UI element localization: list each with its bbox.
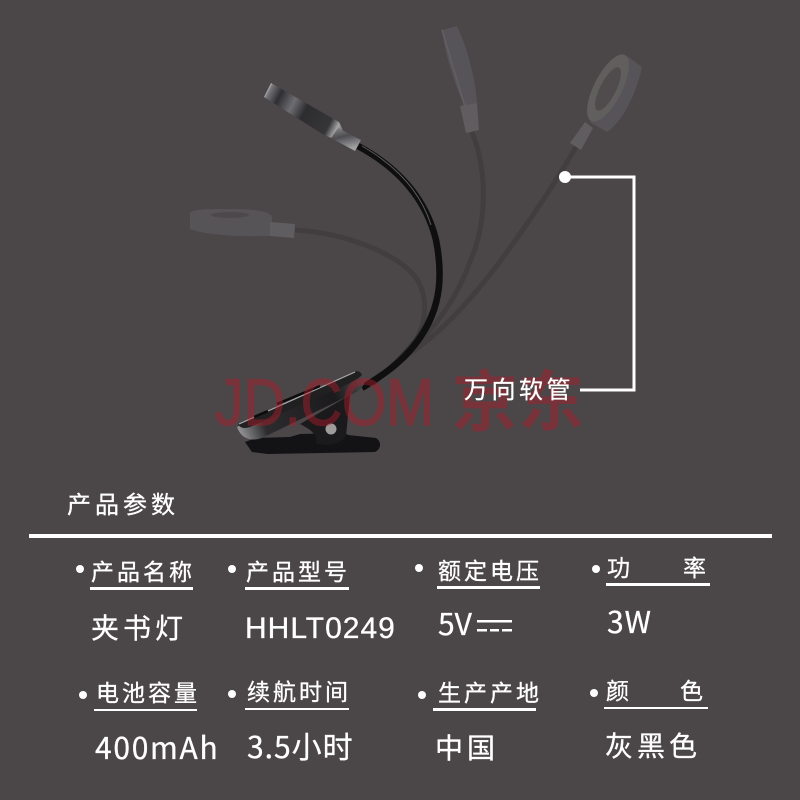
secondary hose strands — [372, 300, 436, 384]
spec: product name: 夹书灯 — [91, 607, 187, 647]
flexible hose — [358, 146, 440, 388]
spec: origin: 生产产地 — [438, 674, 542, 708]
spec: product name: 产品名称 — [91, 553, 195, 587]
spec: rated voltage: 额定电压 — [438, 552, 542, 586]
spec: colour: 颜 — [606, 672, 632, 706]
main lamp with flexible hose — [237, 83, 440, 454]
spec: battery capacity — [79, 674, 219, 768]
spec: power: 率 — [683, 549, 709, 583]
spec: model: 产品型号 — [246, 553, 350, 587]
spec: rated voltage: 5V — [438, 600, 473, 644]
ghost lamp: upper middle position — [404, 26, 483, 357]
divider — [29, 534, 772, 538]
spec: origin: 中国 — [435, 727, 499, 767]
clip pivot arm — [300, 395, 350, 445]
spec: colour: 色 — [680, 672, 706, 706]
spec: power: 功 — [607, 549, 633, 583]
spec: model — [228, 553, 396, 645]
spec: power — [592, 549, 710, 642]
spec: origin — [418, 674, 542, 767]
clip base — [245, 433, 380, 454]
clip top plate — [237, 371, 364, 440]
spec: power: 3W — [607, 598, 652, 642]
heading: 产品参数 — [67, 485, 179, 520]
lamp head — [264, 83, 343, 139]
callout: flexible hose — [464, 171, 634, 405]
ghost lamp: upper right position — [404, 49, 642, 357]
spec: colour: 灰黑色 — [605, 725, 701, 765]
ghost lamp: left position — [190, 209, 425, 357]
pivot screw — [326, 424, 336, 434]
spec: product name — [76, 553, 195, 647]
spec: rated voltage — [415, 552, 542, 644]
callout: flexible hose: 万向软管 — [464, 370, 574, 405]
spec: colour — [590, 672, 708, 765]
spec: model: HHLT0249 — [245, 612, 396, 645]
watermark — [215, 349, 584, 445]
spec: battery capacity: 电池容量 — [96, 674, 200, 708]
watermark: JD.COM — [215, 365, 434, 439]
lamp neck — [331, 128, 361, 151]
spec: runtime: 3.5小时 — [247, 723, 354, 767]
spec: battery capacity: 400mAh — [95, 724, 219, 768]
spec: runtime: 续航时间 — [247, 673, 351, 707]
watermark: 京东 — [452, 349, 584, 445]
spec: runtime — [228, 673, 354, 767]
